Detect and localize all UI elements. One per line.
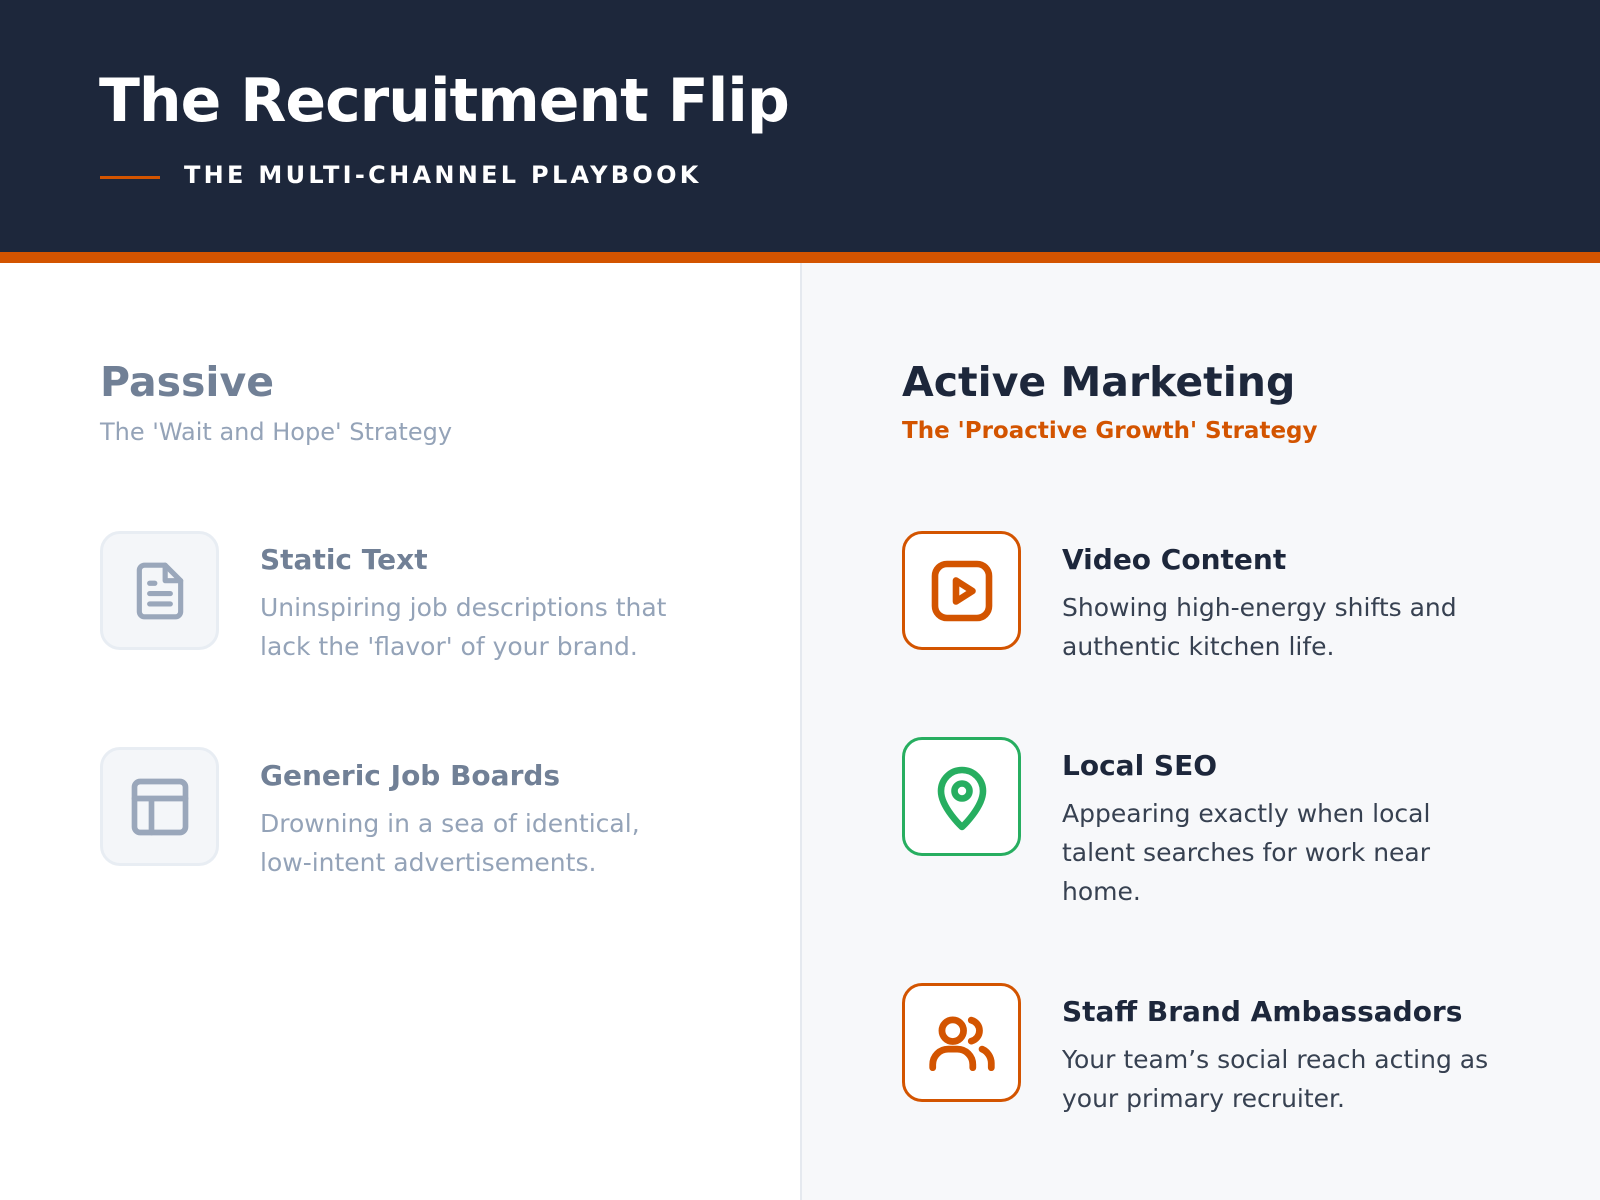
subtitle: THE MULTI-CHANNEL PLAYBOOK bbox=[184, 161, 702, 189]
item: static text bbox=[100, 531, 666, 661]
item: local seo: Local SEO bbox=[1062, 749, 1217, 782]
item: video content: Showing high-energy shifts and bbox=[1062, 593, 1457, 622]
header bbox=[0, 0, 1600, 252]
item: local seo bbox=[902, 737, 1430, 906]
item: generic job boards: Drowning in a sea of identical, bbox=[260, 809, 640, 838]
item: generic job boards: Generic Job Boards bbox=[260, 759, 560, 792]
passive subheading: The 'Wait and Hope' Strategy bbox=[100, 418, 452, 446]
item: staff brand ambassadors bbox=[902, 983, 1488, 1113]
item: local seo: home. bbox=[1062, 877, 1141, 906]
panel: active bbox=[800, 263, 1600, 1200]
title: The Recruitment Flip bbox=[99, 66, 789, 136]
item: static text: Static Text bbox=[260, 543, 428, 576]
item: staff brand ambassadors: your primary recruiter. bbox=[1062, 1084, 1345, 1113]
panel: passive bbox=[100, 358, 666, 877]
item: staff brand ambassadors: Staff Brand Ambassadors bbox=[1062, 995, 1462, 1028]
item: staff brand ambassadors: Your team’s social reach acting as bbox=[1062, 1045, 1488, 1074]
item: static text: Uninspiring job descriptions that bbox=[260, 593, 666, 622]
passive heading: Passive bbox=[100, 358, 274, 406]
item: generic job boards bbox=[100, 747, 640, 877]
item: video content: authentic kitchen life. bbox=[1062, 632, 1334, 661]
icon: users bbox=[902, 983, 1021, 1102]
item: local seo: Appearing exactly when local bbox=[1062, 799, 1430, 828]
active subheading: The 'Proactive Growth' Strategy bbox=[902, 418, 1318, 444]
icon: map pin bbox=[902, 737, 1021, 856]
item: local seo: talent searches for work near bbox=[1062, 838, 1430, 867]
active heading: Active Marketing bbox=[902, 358, 1295, 406]
icon: play bbox=[902, 531, 1021, 650]
item: static text: lack the 'flavor' of your brand. bbox=[260, 632, 638, 661]
item: generic job boards: low-intent advertisements. bbox=[260, 848, 596, 877]
icon: layout bbox=[100, 747, 219, 866]
item: video content: Video Content bbox=[1062, 543, 1286, 576]
item: video content bbox=[902, 531, 1457, 661]
icon: document bbox=[100, 531, 219, 650]
